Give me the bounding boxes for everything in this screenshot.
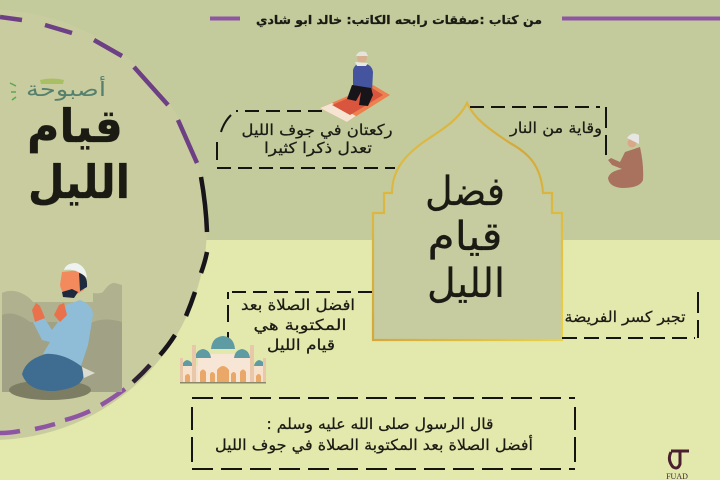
box: best prayer after obligatory: قيام الليل [267, 336, 335, 354]
title: Qiyam al-Layl: الليل [28, 155, 130, 209]
logo: Osbouha [10, 76, 106, 101]
header: top right rule [562, 16, 720, 20]
illustration: man making dua [2, 263, 122, 400]
box: best prayer after obligatory [228, 292, 372, 354]
background: upper band [0, 0, 720, 240]
icon: mosque [180, 336, 266, 384]
panel: left circle [0, 10, 207, 440]
box: best prayer after obligatory: افضل الصلاة بعد [241, 296, 355, 314]
mihrab heading: قيام [428, 214, 502, 260]
box: mends the obligatory prayer: تجبر كسر الفريضة [564, 308, 686, 326]
header: book source: من كتاب :صفقات رابحه الكاتب: خالد ابو شادي [256, 13, 542, 28]
box: two rakats: تعدل ذكرا كثيرا [264, 139, 372, 157]
box: two rakats [217, 111, 395, 168]
mihrab heading: الليل [427, 261, 505, 307]
box: mends the obligatory prayer [562, 292, 698, 338]
box: hadith: أفضل الصلاة بعد المكتوبة الصلاة في جوف الليل [215, 435, 533, 455]
box: two rakats: ركعتان في جوف الليل [242, 121, 392, 140]
icon: seated man [608, 134, 643, 188]
box: protection from fire [470, 107, 606, 155]
background: lower band [0, 240, 720, 480]
logo: Fuad [666, 451, 689, 480]
logo: Osbouha: أصبوحة [26, 76, 106, 101]
circle dashed outline [0, 17, 207, 433]
panel: mihrab arch [373, 103, 562, 340]
icon: man on prayer rug [320, 52, 390, 122]
box: best prayer after obligatory: المكتوبة هي [254, 316, 346, 335]
box: hadith: قال الرسول صلى الله عليه وسلم : [266, 415, 494, 433]
mihrab heading [425, 169, 505, 307]
title: Qiyam al-Layl: قيام [27, 99, 123, 153]
header: top left rule [210, 16, 240, 20]
box: hadith [192, 398, 575, 469]
box: protection from fire: وقاية من النار [509, 119, 602, 137]
mihrab heading: فضل [425, 169, 505, 215]
title: Qiyam al-Layl [27, 99, 130, 209]
